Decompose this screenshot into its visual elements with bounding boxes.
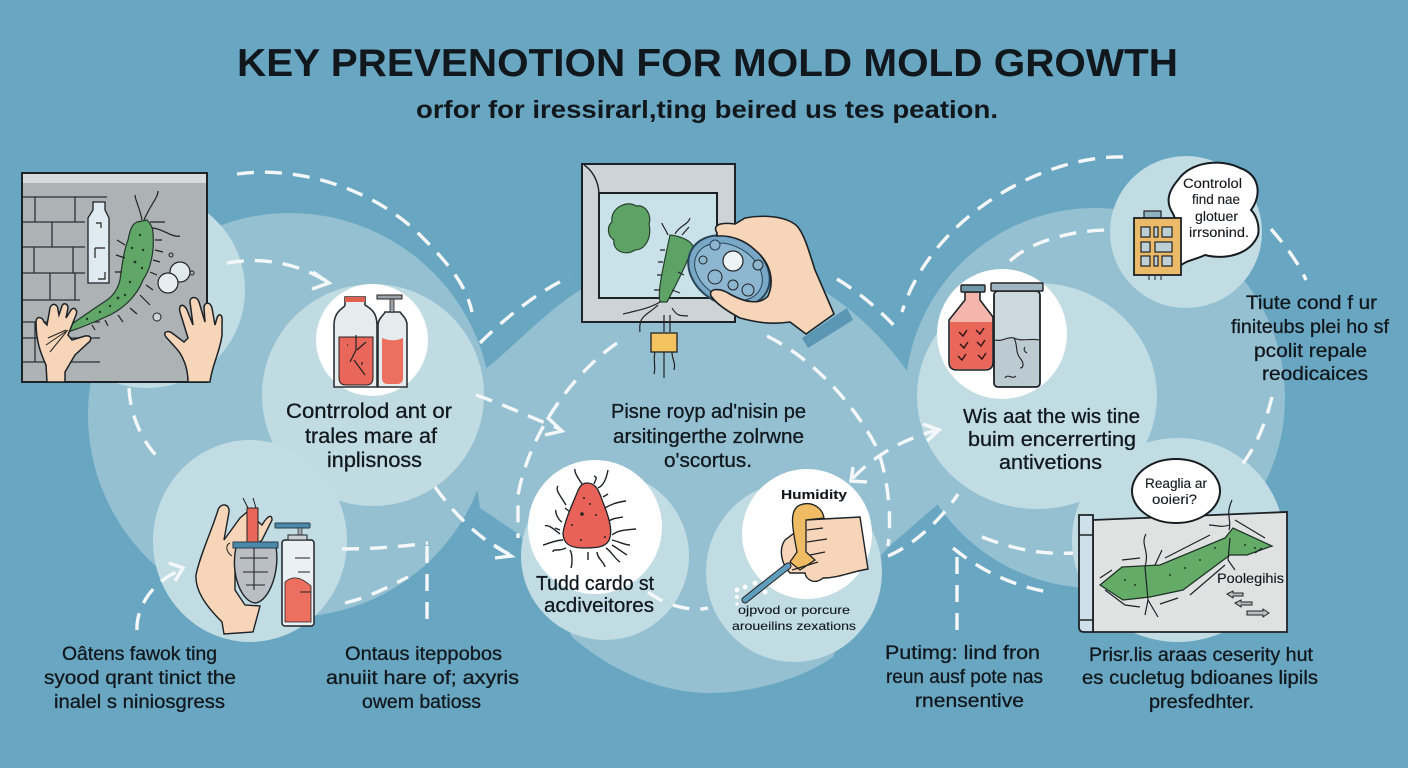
icon: mold on wall — [22, 173, 222, 382]
text: bottom 1: Oâtens fawok ting — [62, 643, 217, 665]
text: right column: pcolit repale — [1254, 340, 1367, 362]
text: left bubble: trales mare af — [305, 425, 437, 448]
text: right column: reodicaices — [1262, 363, 1368, 385]
icon: humidity hand: Humidity — [781, 487, 848, 502]
icon: humidity hand — [732, 487, 868, 633]
text: bottom 2: anuiit hare of; axyris — [326, 667, 519, 689]
text: bottom 4 — [1082, 644, 1318, 713]
icon: jars — [949, 283, 1043, 387]
callout: speech bubble lower right: ooieri? — [1152, 492, 1197, 507]
icon: bottles — [334, 295, 407, 387]
text: bottom 3: reun ausf pote nas — [886, 666, 1043, 688]
text: bottom 2 — [326, 643, 519, 713]
icon: mold sample window and hand — [582, 164, 853, 378]
text: bottom 2: owem batioss — [362, 691, 481, 713]
icon: building — [1134, 211, 1181, 280]
text: bottom 1: syood qrant tinict the — [44, 667, 236, 689]
text: bottom 3: rnensentive — [915, 690, 1024, 712]
text: bottom 1 — [44, 643, 236, 713]
callout: speech bubble lower right — [1132, 459, 1220, 523]
icon: mold spore — [543, 469, 636, 568]
text: right bubble: antivetions — [999, 451, 1102, 474]
text: right bubble — [963, 405, 1140, 474]
text: right column — [1231, 292, 1390, 385]
text: bottom 3 — [885, 642, 1043, 712]
icon: mold map panel: Poolegihis — [1217, 571, 1284, 586]
text: spore — [536, 573, 654, 617]
text: right bubble: Wis aat the wis tine — [963, 405, 1140, 428]
icon: humidity hand: ojpvod or porcure — [738, 603, 850, 617]
text: left bubble: Contrrolod ant or — [286, 400, 452, 423]
callout: speech bubble top right — [1169, 163, 1259, 267]
text: bottom 3: Putimg: lind fron — [885, 642, 1040, 664]
text: right bubble: buim encerrerting — [968, 428, 1136, 451]
callout: speech bubble top right: Controlol — [1183, 176, 1242, 191]
background circles — [49, 156, 1285, 693]
text: bottom 2: Ontaus iteppobos — [345, 643, 502, 665]
text: bottom 4: presfedhter. — [1149, 691, 1254, 713]
text: right column: finiteubs plei ho sf — [1231, 316, 1390, 338]
text: center: arsitingerthe zolrwne — [613, 425, 804, 448]
callout: speech bubble top right: irrsonind. — [1189, 225, 1249, 240]
icon: humidity hand: aroueilins zexations — [732, 619, 856, 633]
arrowheads — [169, 272, 939, 581]
text: center: o'scortus. — [664, 449, 752, 472]
text: spore: Tudd cardo st — [536, 573, 654, 595]
icon: hand holding bottles — [196, 498, 314, 634]
text: right column: Tiute cond f ur — [1246, 292, 1378, 314]
text: bottom 4: Prisr.lis araas ceserity hut — [1089, 644, 1314, 666]
text: left bubble: inplisnoss — [327, 449, 422, 472]
icon: mold map panel — [1079, 500, 1287, 632]
title: KEY PREVENOTION FOR MOLD MOLD GROWTH — [237, 42, 1178, 85]
text: bottom 4: es cucletug bdioanes lipils — [1082, 667, 1318, 689]
text: center — [611, 400, 806, 472]
text: left bubble — [286, 400, 452, 472]
dashed connectors — [129, 157, 1306, 630]
callout: speech bubble top right: find nae — [1192, 192, 1240, 207]
callout: speech bubble top right: glotuer — [1195, 209, 1239, 224]
text: center: Pisne royp ad'nisin pe — [611, 400, 806, 423]
subtitle: orfor for iressirarl,ting beired us tes peation. — [416, 96, 998, 124]
text: bottom 1: inalel s niniosgress — [54, 691, 225, 713]
text: spore: acdiveitores — [544, 595, 654, 617]
callout: speech bubble lower right: Reaglia ar — [1145, 476, 1207, 491]
